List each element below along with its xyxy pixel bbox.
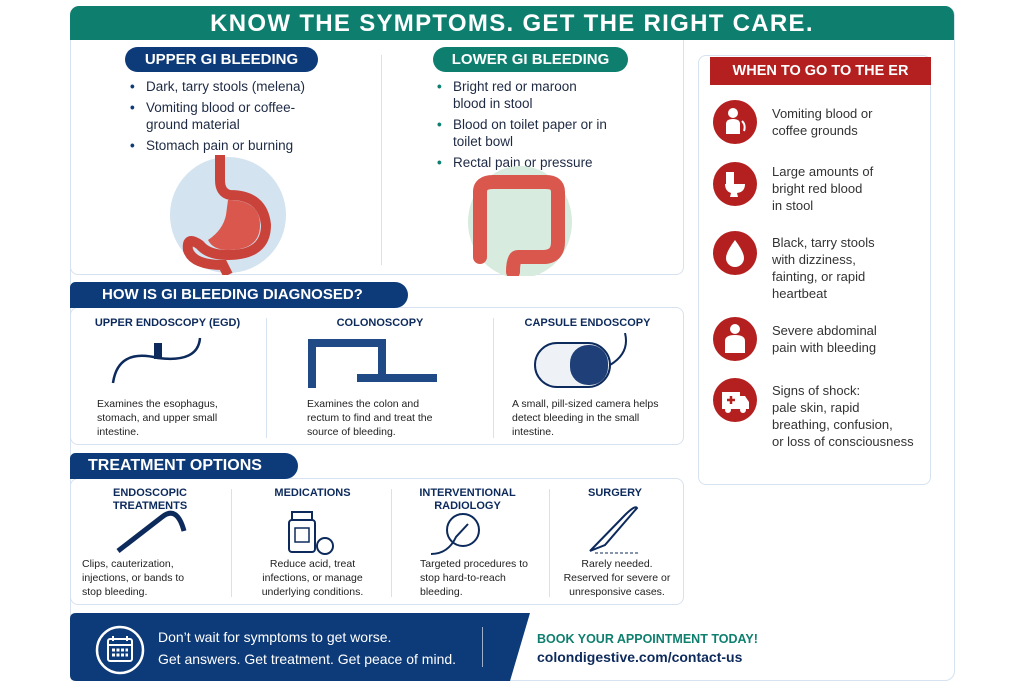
text: booking — [537, 632, 758, 665]
title: KNOW THE SYMPTOMS. GET THE RIGHT CARE. — [210, 10, 814, 37]
text: CTA message — [158, 629, 456, 667]
title — [70, 6, 954, 40]
list: lower GI symptoms: Bright red or maroon blood in stool — [453, 79, 577, 111]
heading: treatment — [70, 453, 298, 479]
text: ER 4 — [772, 323, 877, 355]
heading: treatment: TREATMENT OPTIONS — [88, 457, 262, 474]
list: upper GI symptoms — [130, 79, 305, 153]
icon: abdomen — [713, 317, 757, 361]
text: A small, pill-sized camera helps detect bleeding in the small intestine. — [512, 398, 658, 438]
col: IR — [419, 487, 516, 512]
text: Examines the colon and rectum to find and treat the source of bleeding. — [307, 398, 432, 438]
col: endoscopic: ENDOSCOPIC — [113, 487, 187, 499]
heading: ER: WHEN TO GO TO THE ER — [733, 63, 908, 79]
list: upper GI symptoms: Dark, tarry stools (melena) — [146, 79, 305, 94]
col: EGD: UPPER ENDOSCOPY (EGD) — [95, 317, 240, 329]
banner: navy block — [70, 613, 530, 681]
list: upper GI symptoms: Vomiting blood or coffee-ground material — [146, 100, 295, 132]
col: endoscopic — [113, 487, 187, 512]
list: lower GI symptoms: Blood on toilet paper or in toilet bowl — [453, 117, 607, 149]
text: ER 3: Black, tarry stools — [772, 235, 875, 250]
icon: ambulance — [713, 378, 757, 422]
text: ER 3: with dizziness, — [772, 252, 856, 267]
text: ER 4: pain with bleeding — [772, 340, 876, 355]
text: Clips, cauterization, injections, or bands to stop bleeding. — [82, 558, 184, 598]
list: lower GI symptoms: Rectal pain or pressure — [453, 155, 593, 170]
panel: treatment — [70, 478, 684, 605]
panel: symptoms — [70, 40, 684, 275]
col: IR: RADIOLOGY — [434, 500, 501, 512]
text: ER 1: coffee grounds — [772, 123, 858, 138]
icon: calendar — [96, 626, 144, 674]
col: medications: MEDICATIONS — [274, 487, 351, 499]
panel: diagnosis — [70, 307, 684, 445]
col: endoscopic: TREATMENTS — [113, 500, 187, 512]
text: ER 5 — [772, 383, 914, 449]
text: ER 2: Large amounts of — [772, 164, 873, 179]
text: ER 2: bright red blood — [772, 181, 862, 196]
icon: vomiting — [713, 100, 757, 144]
text: ER 2: in stool — [772, 198, 813, 213]
text: Rarely needed. — [581, 558, 653, 570]
text: ER 5: breathing, confusion, — [772, 417, 893, 432]
text: ER 2 — [772, 164, 874, 213]
list: upper GI symptoms: Stomach pain or burning — [146, 138, 293, 153]
heading: diagnosis — [70, 282, 408, 308]
banner: CTA — [70, 613, 758, 681]
text: booking: colondigestive.com/contact-us — [537, 649, 742, 665]
text: ER 3 — [772, 235, 875, 301]
heading: lower GI — [433, 47, 628, 72]
text: Reduce acid, treat infections, or manage underlying conditions. — [262, 558, 363, 598]
icon: toilet — [713, 162, 757, 206]
col: capsule: CAPSULE ENDOSCOPY — [525, 317, 650, 329]
col: colonoscopy: COLONOSCOPY — [337, 317, 423, 329]
text: Targeted procedures to stop hard-to-reach bleeding. — [420, 558, 528, 598]
text: ER 3: fainting, or rapid — [772, 269, 865, 284]
text: CTA message: Don’t wait for symptoms to get worse. — [158, 629, 391, 645]
col: surgery: SURGERY — [588, 487, 642, 499]
heading: ER — [710, 57, 931, 85]
panel: ER — [698, 55, 931, 485]
text: Examines the esophagus, stomach, and upper small intestine. — [97, 398, 218, 438]
list: lower GI symptoms — [437, 79, 607, 170]
text: ER 3: heartbeat — [772, 286, 827, 301]
text: CTA message: Get answers. Get treatment. Get peace of mind. — [158, 651, 456, 667]
heading: upper GI: UPPER GI BLEEDING — [145, 51, 298, 68]
text: ER 5: or loss of consciousness — [772, 434, 914, 449]
text: ER 1 — [772, 106, 872, 138]
icon: drop — [713, 231, 757, 275]
heading: upper GI — [125, 47, 318, 72]
text: Reserved for severe or unresponsive cases. — [564, 572, 670, 598]
heading: diagnosis: HOW IS GI BLEEDING DIAGNOSED? — [102, 286, 363, 303]
text: ER 1: Vomiting blood or — [772, 106, 872, 121]
illustration: stomach — [170, 155, 286, 275]
text: ER 5: Signs of shock: — [772, 383, 860, 398]
text: booking: BOOK YOUR APPOINTMENT TODAY! — [537, 632, 758, 646]
illustration: colon — [468, 166, 572, 276]
text: ER 4: Severe abdominal — [772, 323, 877, 338]
heading: lower GI: LOWER GI BLEEDING — [452, 51, 609, 68]
text: ER 5: pale skin, rapid — [772, 400, 859, 415]
col: IR: INTERVENTIONAL — [419, 487, 516, 499]
